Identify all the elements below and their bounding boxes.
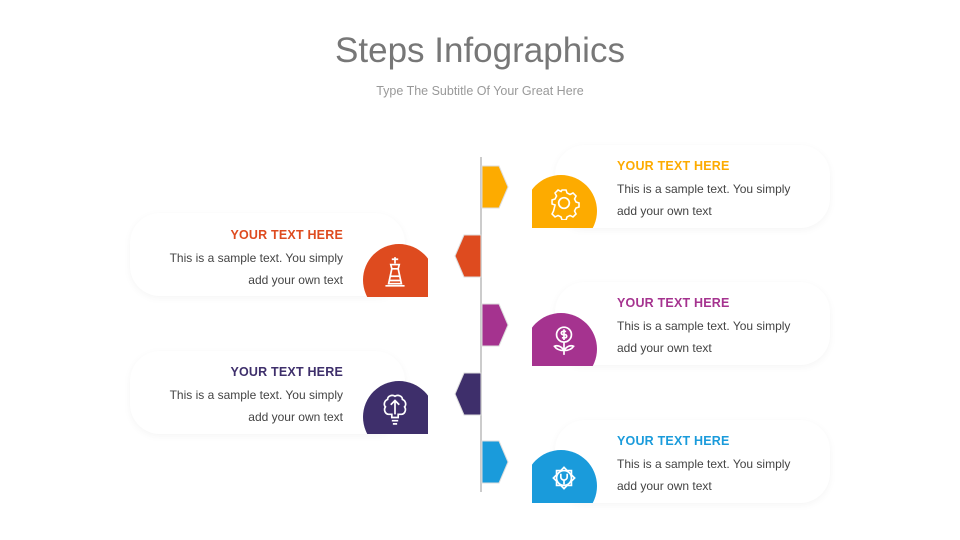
tab 2 xyxy=(454,234,482,278)
text 4: This is a sample text. You simply xyxy=(170,388,343,402)
text 4: YOUR TEXT HERE xyxy=(230,365,343,379)
text 2: YOUR TEXT HERE xyxy=(230,228,343,242)
text 3: This is a sample text. You simply xyxy=(617,319,790,333)
text 1: This is a sample text. You simply xyxy=(617,182,790,196)
text 1: add your own text xyxy=(617,204,712,218)
tab 4 xyxy=(454,372,482,416)
text 2: add your own text xyxy=(248,273,343,287)
text 1: YOUR TEXT HERE xyxy=(617,159,730,173)
text 5: YOUR TEXT HERE xyxy=(617,434,730,448)
text 5: This is a sample text. You simply xyxy=(617,457,790,471)
text 2 xyxy=(170,228,343,287)
icon: chess king xyxy=(363,244,428,297)
card 1 right xyxy=(555,145,830,228)
text 4 xyxy=(170,365,343,424)
card 2 left xyxy=(130,213,405,296)
text 1 xyxy=(617,159,790,218)
text 3: YOUR TEXT HERE xyxy=(617,296,730,310)
tab 5 xyxy=(482,440,508,484)
text 4: add your own text xyxy=(248,410,343,424)
title: Steps Infographics xyxy=(335,31,625,70)
text 3 xyxy=(617,296,790,355)
text 2: This is a sample text. You simply xyxy=(170,251,343,265)
subtitle: Type The Subtitle Of Your Great Here xyxy=(376,84,584,98)
text 3: add your own text xyxy=(617,341,712,355)
tab 1 xyxy=(482,166,508,208)
card 5 right xyxy=(555,420,830,503)
timeline line xyxy=(480,157,482,492)
icon: gear xyxy=(532,175,597,228)
text 5 xyxy=(617,434,790,493)
icon: brain bulb xyxy=(363,381,428,434)
icon: gear wrench xyxy=(532,450,597,503)
card 3 right xyxy=(555,282,830,365)
icon: money plant xyxy=(532,313,597,366)
text 5: add your own text xyxy=(617,479,712,493)
card 4 left xyxy=(130,351,405,434)
tab 3 xyxy=(482,304,508,346)
